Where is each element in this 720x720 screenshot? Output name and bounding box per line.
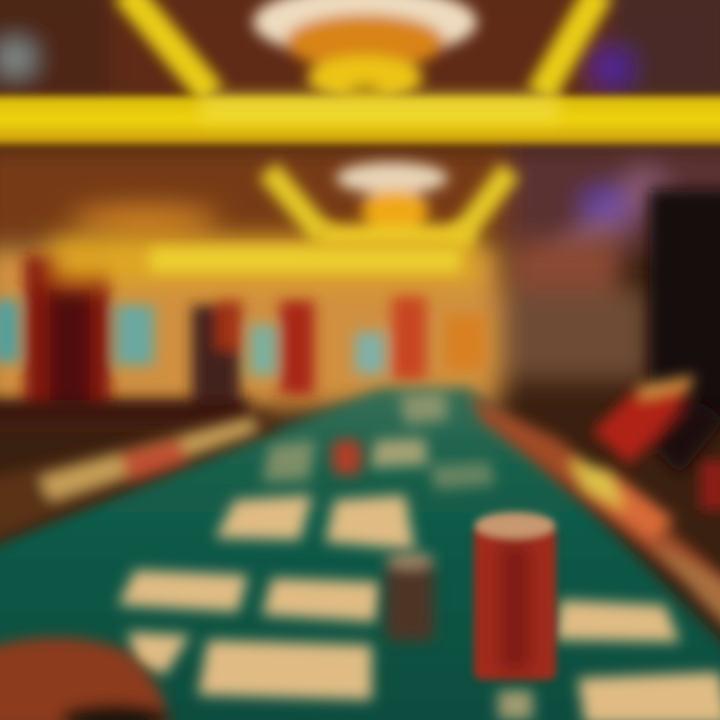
lower ceiling — [0, 145, 720, 310]
dark chip stack — [386, 552, 434, 641]
foreground chandelier — [253, 0, 477, 110]
small red chip stack — [332, 440, 362, 475]
foreground diagonal beams — [125, 0, 600, 95]
main yellow beam — [0, 94, 720, 144]
hand in foreground — [0, 638, 170, 720]
left table edge — [0, 410, 270, 545]
back wall — [0, 240, 650, 410]
red chip stack — [474, 512, 556, 680]
right table edge — [470, 395, 720, 640]
distant chandelier and beams — [50, 162, 510, 282]
wall windows and columns — [0, 255, 485, 428]
right dark pillar — [650, 190, 720, 420]
table betting squares — [118, 392, 720, 720]
red chair — [592, 375, 720, 475]
upper ceiling — [0, 0, 720, 110]
gaming table felt — [0, 388, 720, 720]
